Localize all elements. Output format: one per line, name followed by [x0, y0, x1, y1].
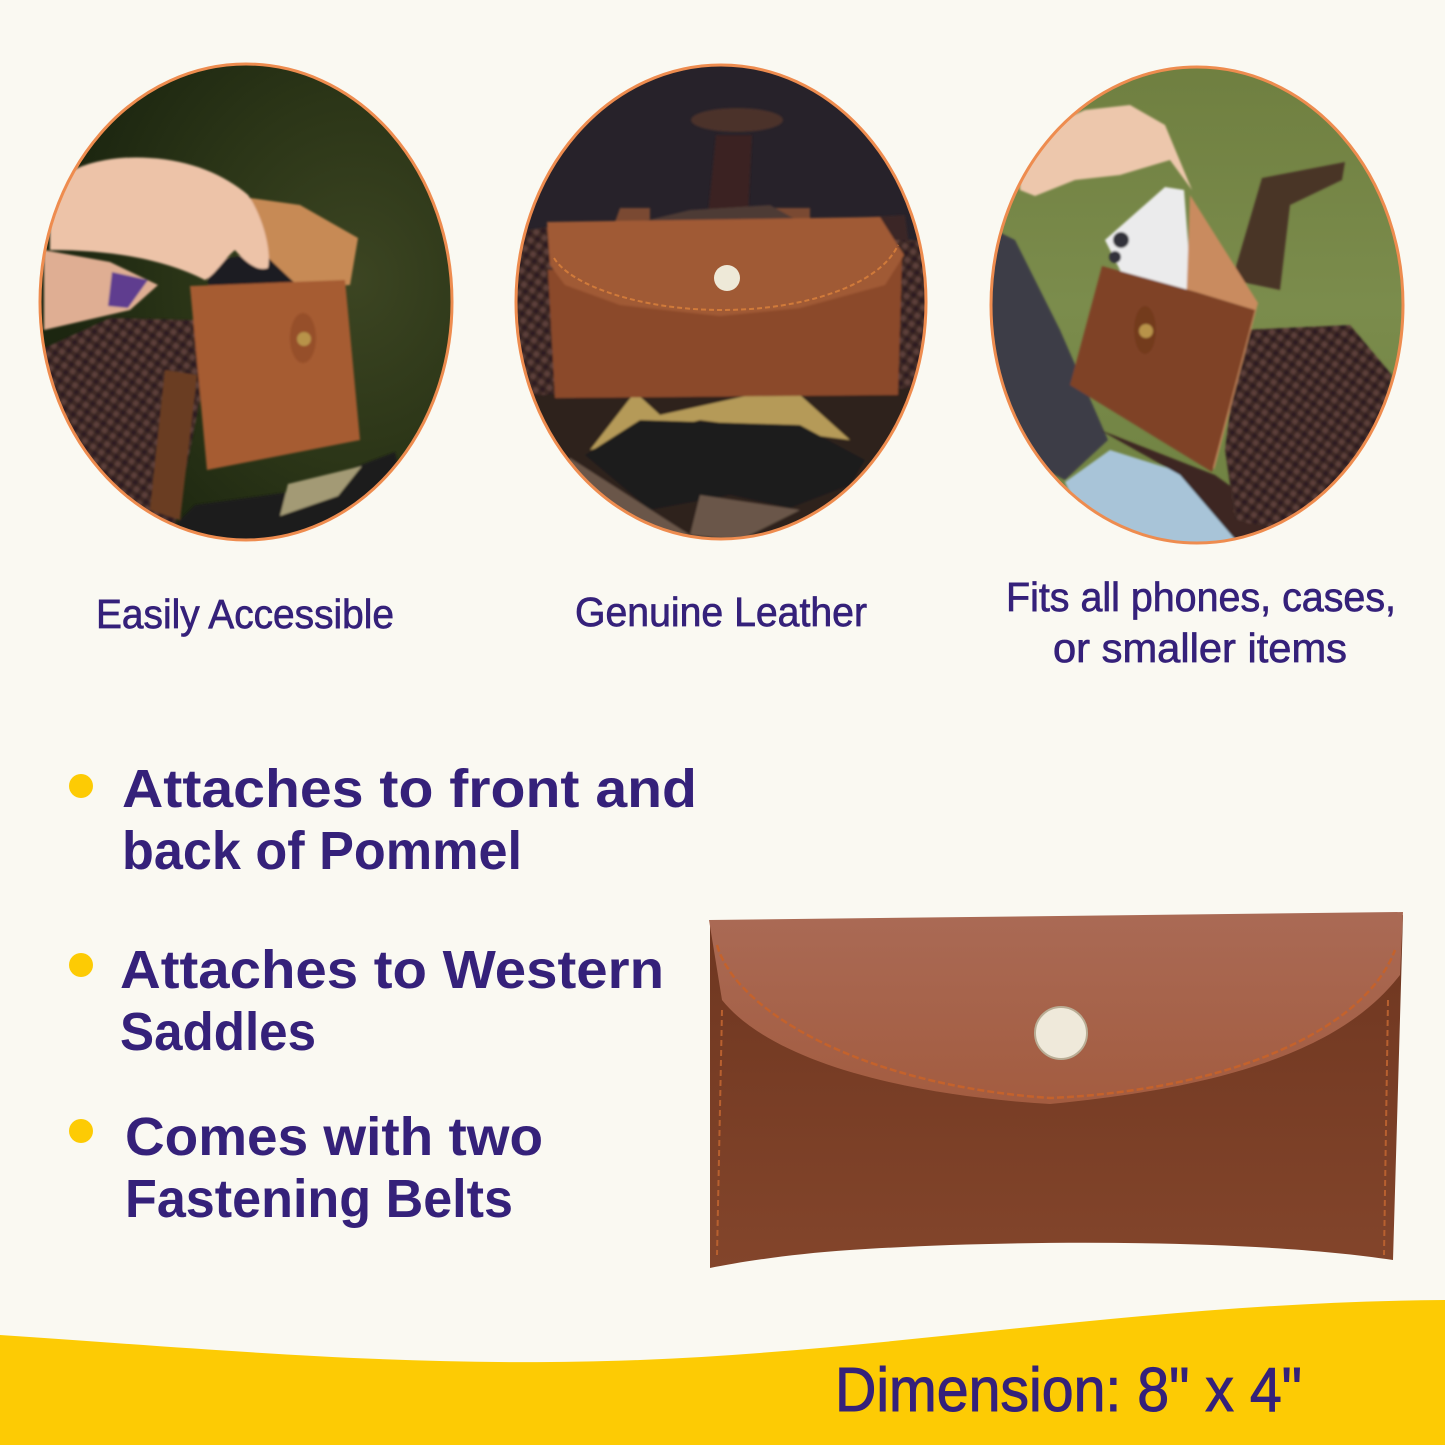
- bullet: fastening belts: [69, 1107, 543, 1229]
- photo border 3: [991, 67, 1403, 543]
- bullet: attaches to pommel: Attaches to front and: [122, 759, 697, 819]
- photo: pouch front view, genuine leather: [515, 60, 930, 560]
- photo border 2: [516, 65, 926, 539]
- bullet: fastening belts: Comes with two: [125, 1107, 543, 1167]
- photo: pouch on saddle, easily accessible: [40, 60, 460, 560]
- bottom yellow wave: [0, 1300, 1445, 1445]
- caption: easily accessible: Easily Accessible: [96, 591, 394, 637]
- photo: phone going into pouch: [985, 60, 1410, 560]
- photo border 1: [40, 64, 452, 540]
- caption: fits all phones: or smaller items: [1053, 625, 1347, 671]
- bullet: fastening belts: Fastening Belts: [125, 1169, 513, 1229]
- caption: genuine leather: Genuine Leather: [575, 589, 867, 635]
- bullet: attaches to pommel: [69, 759, 697, 881]
- caption: fits all phones: Fits all phones, cases,: [1006, 574, 1396, 620]
- bullet: western saddles: Saddles: [120, 1002, 316, 1062]
- bullet: western saddles: [69, 940, 664, 1062]
- bullet: western saddles: Attaches to Western: [120, 940, 664, 1000]
- dimension label: Dimension: 8" x 4": [835, 1356, 1302, 1425]
- caption: fits all phones: [1006, 574, 1396, 671]
- product photo: leather pouch: [709, 912, 1403, 1268]
- bullet: attaches to pommel: back of Pommel: [122, 821, 522, 881]
